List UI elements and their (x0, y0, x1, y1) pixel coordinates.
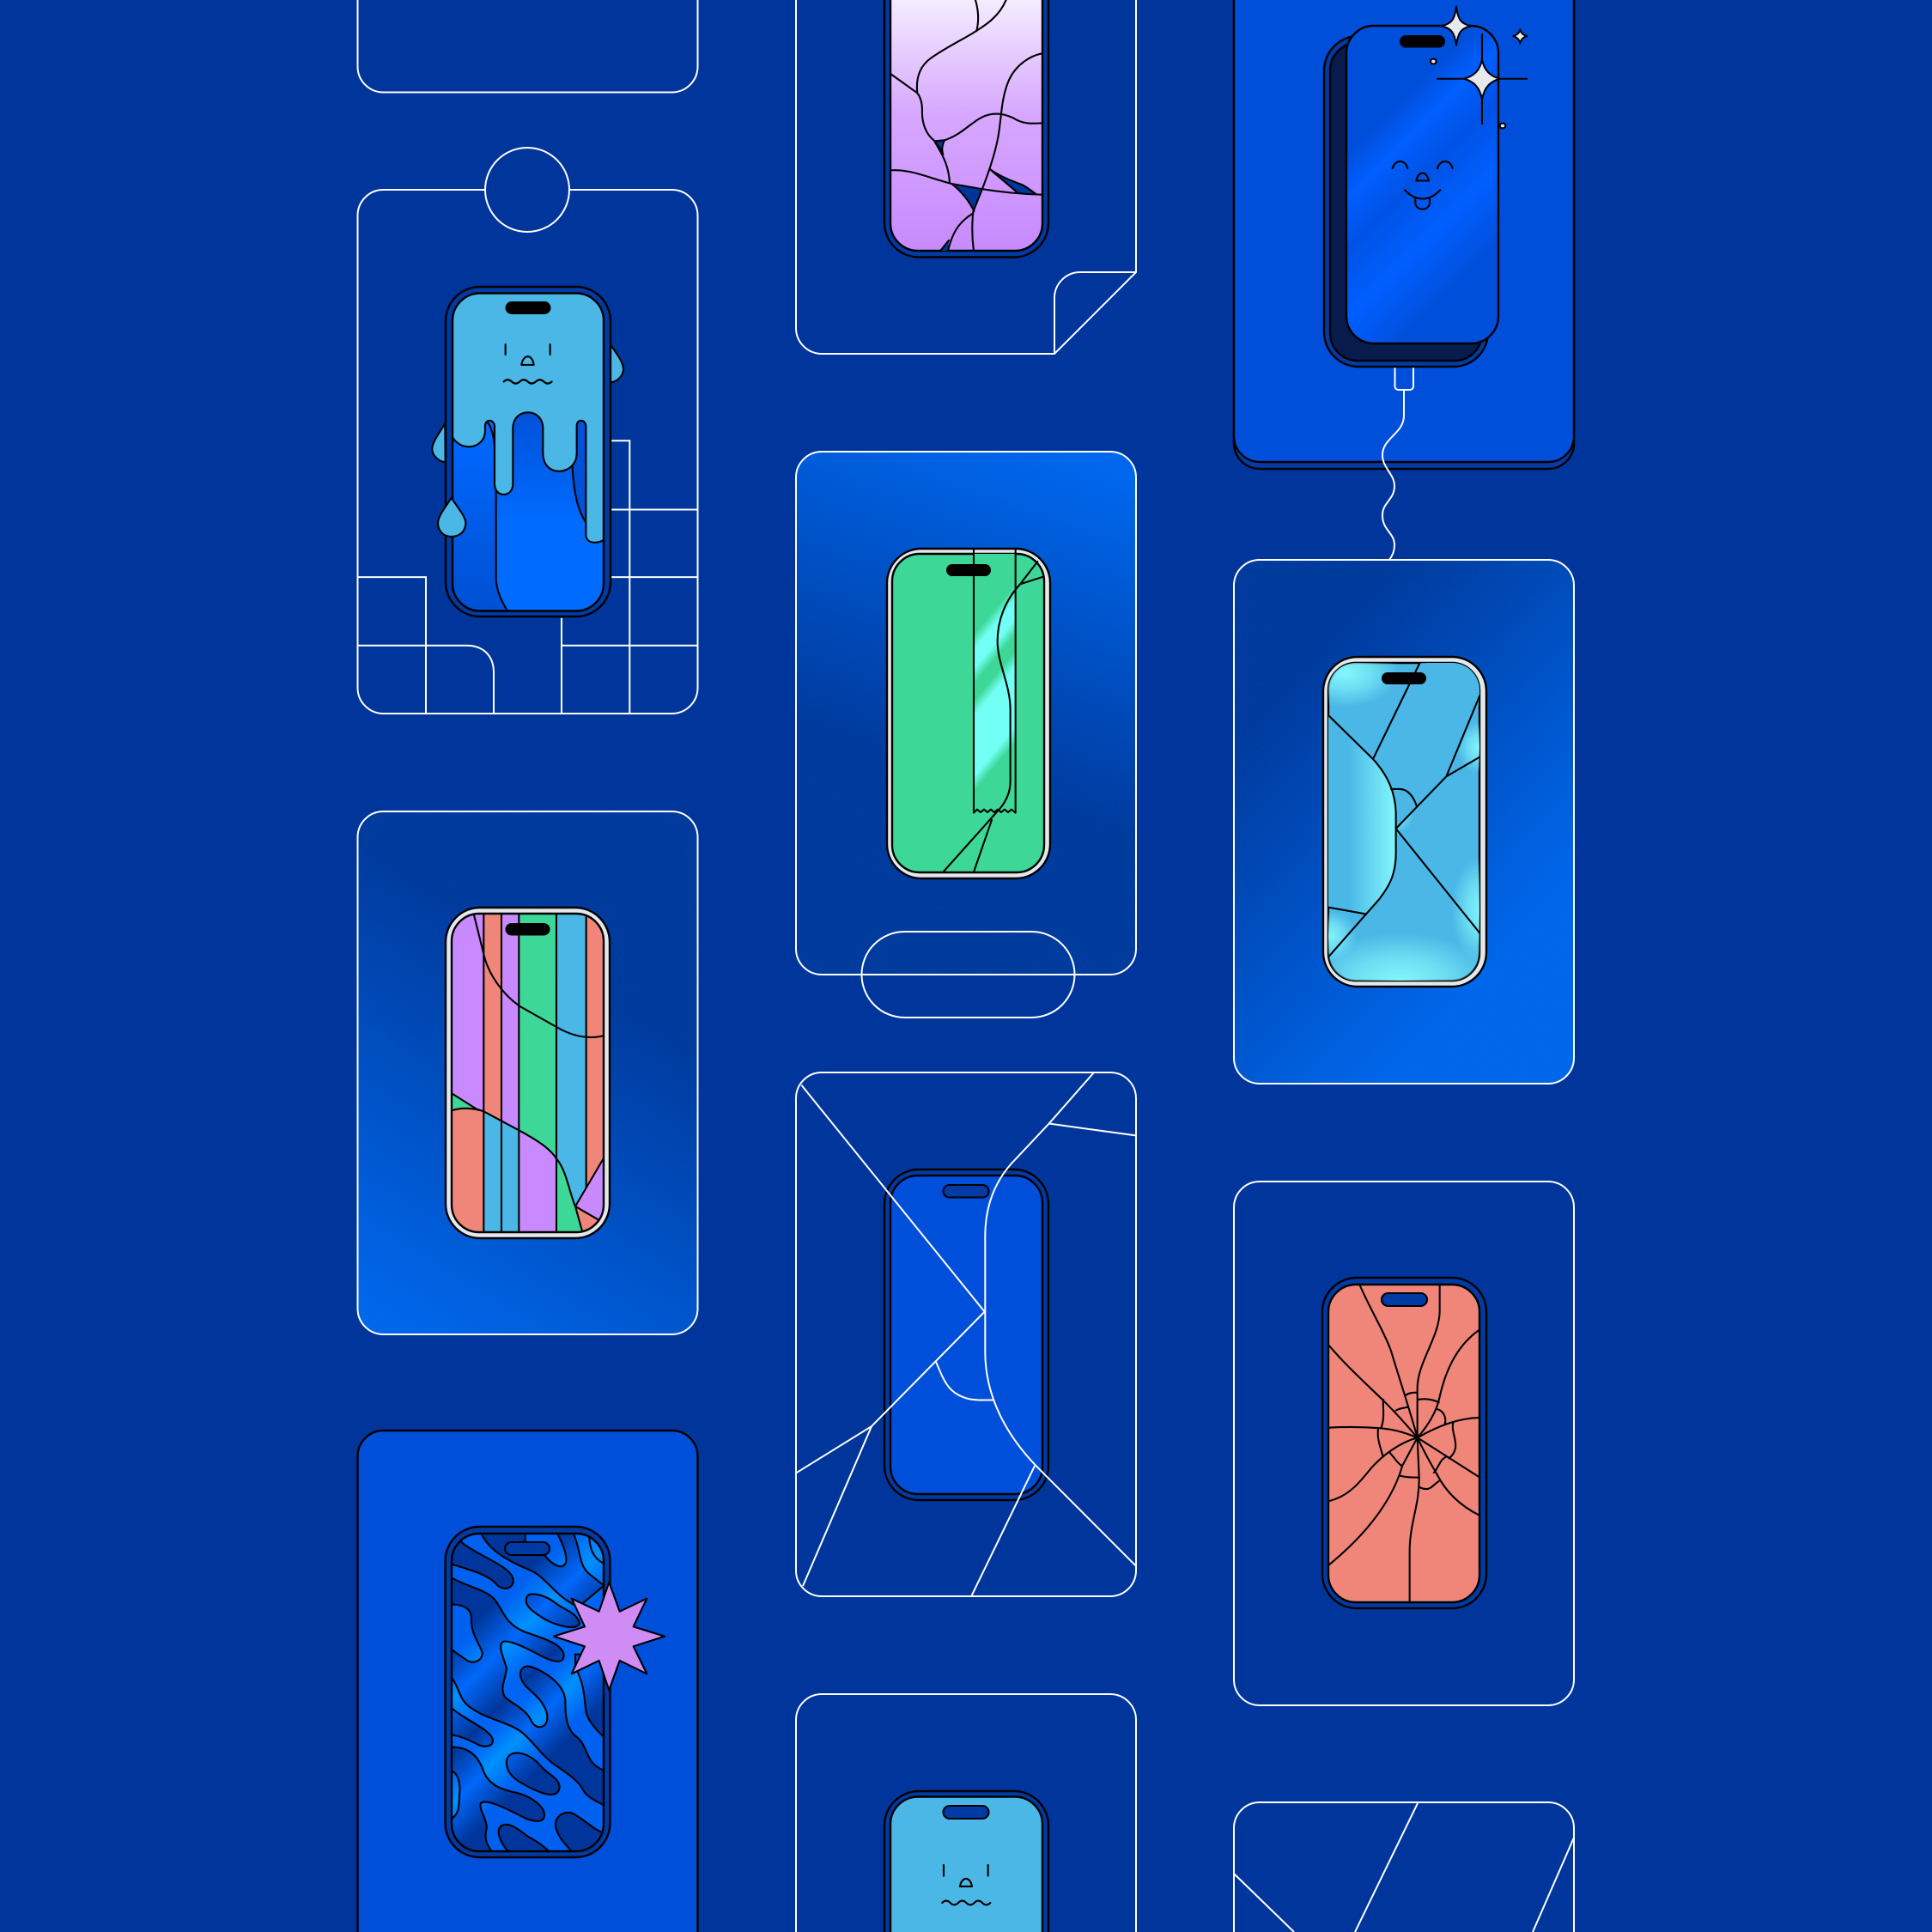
card shadow layer (1234, 0, 1574, 469)
screen cracks (890, 0, 1042, 251)
phone: cyan shattered (1322, 656, 1487, 987)
panel: colour stripes card (357, 811, 697, 1334)
card outline (796, 1072, 1136, 1596)
connector (1394, 368, 1413, 390)
panel: water pattern card (357, 1431, 697, 1932)
panel: outline cracks card (796, 1072, 1136, 1596)
screen (1328, 1285, 1479, 1602)
notch (1382, 672, 1426, 684)
phone body (1323, 657, 1486, 987)
screen stripes (449, 913, 606, 1234)
panel: empty outline card top left (357, 0, 697, 93)
panel: charging phone card (1234, 0, 1574, 560)
face: sad (942, 1865, 990, 1905)
panel: salmon shattered card (1234, 1182, 1574, 1705)
front screen (1346, 26, 1498, 343)
card fill (1234, 0, 1574, 462)
phone body (1322, 1278, 1486, 1608)
icon: side droplets behind phone (432, 344, 623, 462)
white crack lines (796, 1072, 1136, 1595)
screen shards and cracks (1328, 663, 1479, 981)
circle tab (485, 148, 569, 232)
back screen (1330, 43, 1482, 361)
panel: cyan cracked card (1234, 560, 1574, 1084)
notch (1400, 35, 1445, 48)
tape and cracks (943, 549, 1043, 872)
panel: sad phone card bottom (796, 1694, 1136, 1932)
white crack lines (1234, 1803, 1574, 1932)
screen (890, 1796, 1042, 1932)
phone body (446, 908, 610, 1238)
card outline (796, 1694, 1136, 1932)
card outline (1234, 1182, 1574, 1705)
panel: water damage card (357, 148, 698, 714)
card gradient (357, 811, 697, 1334)
phone: blue blank (884, 1170, 1048, 1500)
phone: happy charging (1324, 26, 1498, 367)
phone: colour stripes (446, 908, 610, 1238)
radial cracks (1328, 1285, 1479, 1602)
screen (892, 554, 1044, 872)
screen (1328, 663, 1479, 981)
card gradient (796, 452, 1136, 975)
screen (890, 1176, 1042, 1494)
page fold (1054, 272, 1136, 354)
notch (943, 1185, 989, 1197)
phone body (884, 1791, 1048, 1932)
face: happy (1393, 161, 1453, 210)
panel: folded corner card (796, 0, 1136, 354)
icon: sparkles (1431, 7, 1527, 128)
phone: melting screen (438, 287, 611, 617)
card outline with round tab (357, 190, 697, 714)
notch (1382, 1293, 1427, 1306)
screen pattern (449, 1531, 605, 1853)
notch (505, 1542, 550, 1555)
card outline with fold (796, 0, 1136, 354)
icon: falling droplet (438, 498, 465, 537)
pill tab (862, 932, 1075, 1018)
card fill (357, 1431, 697, 1932)
face: sad (504, 344, 552, 384)
phone body (445, 1527, 610, 1857)
notch (505, 923, 550, 936)
card gradient (1234, 560, 1574, 1084)
phone body (884, 0, 1048, 258)
phone: sad blue (884, 1791, 1048, 1932)
phone: purple cracked (884, 0, 1048, 258)
screen (449, 289, 607, 614)
phone body (446, 287, 611, 617)
card outline (1234, 1802, 1574, 1932)
phone: taped green (887, 549, 1050, 878)
phone: wavy pattern (445, 1527, 665, 1857)
notch (505, 301, 551, 314)
icon: purple burst (554, 1583, 665, 1690)
notch (943, 1806, 989, 1819)
back body (1324, 36, 1488, 367)
charging cable (1382, 390, 1404, 560)
phone body (884, 1170, 1048, 1500)
phone body (887, 549, 1050, 878)
notch (946, 564, 991, 576)
grid lines (358, 440, 698, 713)
screen (890, 0, 1042, 251)
panel: outline cracks card bottom right (1234, 1802, 1574, 1932)
panel: taped screen card (796, 452, 1136, 1018)
phone: salmon shattered (1322, 1278, 1486, 1608)
